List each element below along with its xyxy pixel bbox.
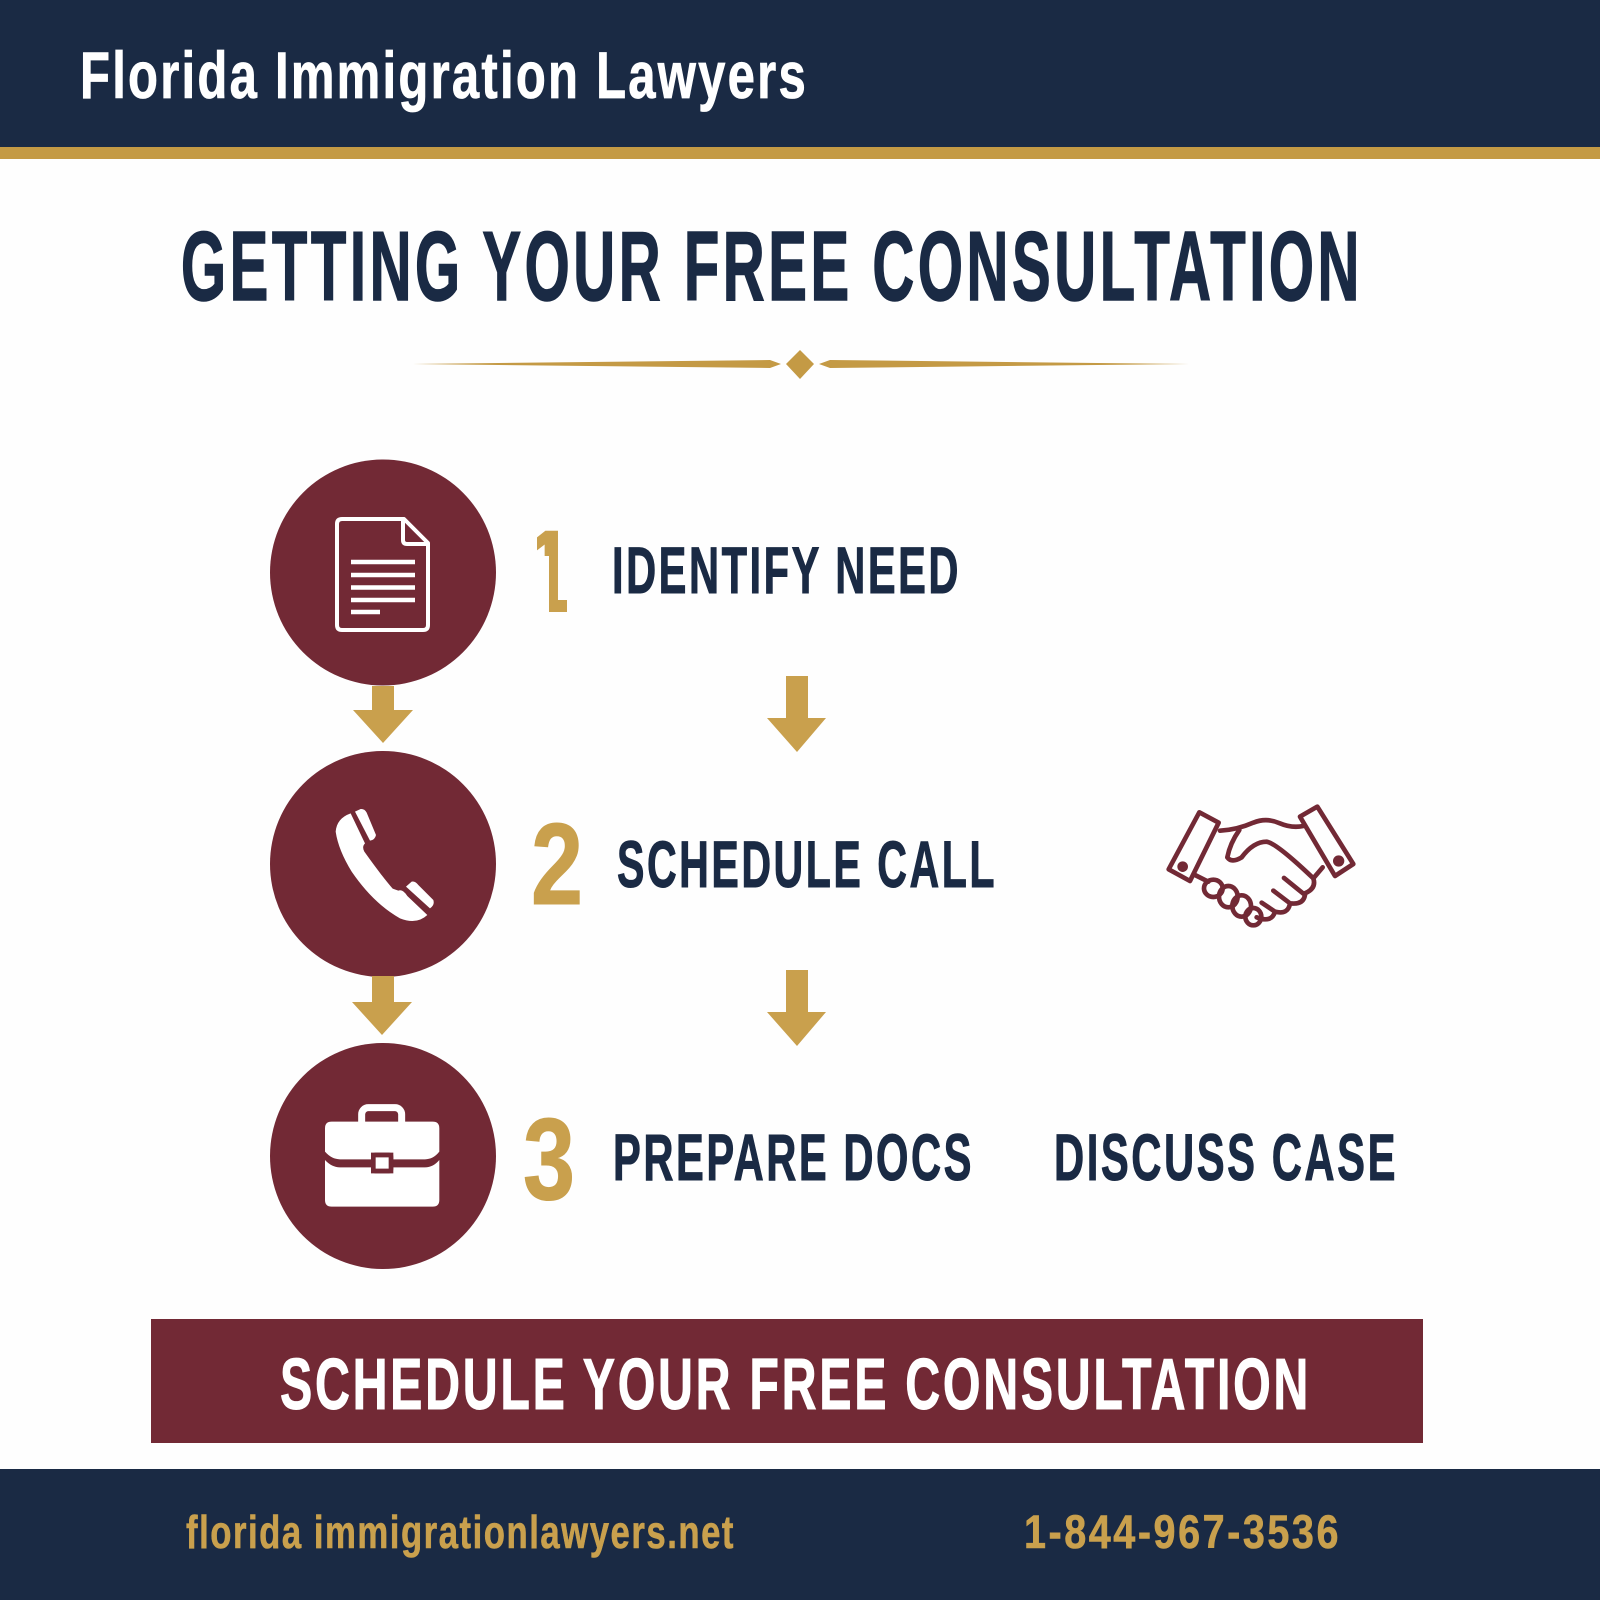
step 3 circle with briefcase icon <box>270 1043 496 1269</box>
icon: handshake <box>1169 807 1353 925</box>
step 3 label: PREPARE DOCS <box>613 1120 974 1194</box>
step 1 label: IDENTIFY NEED <box>612 533 961 607</box>
discuss case label: DISCUSS CASE <box>1054 1120 1398 1194</box>
arrow: circle 1 to circle 2 <box>353 686 413 743</box>
arrow: step 1 to step 2 text column <box>767 676 826 752</box>
icon: briefcase <box>325 1108 439 1207</box>
arrow: step 2 to step 3 text column <box>767 970 826 1046</box>
step 2 circle with phone icon <box>270 751 496 977</box>
footer band <box>0 1469 1600 1600</box>
arrow: circle 2 to circle 3 <box>352 976 412 1035</box>
call to action banner <box>151 1319 1423 1443</box>
footer phone number: 1-844-967-3536 <box>1024 1505 1341 1558</box>
icon: document <box>337 519 428 630</box>
step 1 circle with document icon <box>270 460 496 686</box>
icon: telephone <box>336 809 434 921</box>
title divider ornament <box>413 350 1189 379</box>
step 3 number: 3 <box>523 1094 575 1224</box>
step 2 number: 2 <box>531 799 583 929</box>
header firm name: Florida Immigration Lawyers <box>80 38 808 112</box>
header band <box>0 0 1600 159</box>
footer website: florida immigrationlawyers.net <box>186 1506 735 1558</box>
step 2 label: SCHEDULE CALL <box>617 827 997 901</box>
step 1 number: 1 <box>522 506 576 638</box>
